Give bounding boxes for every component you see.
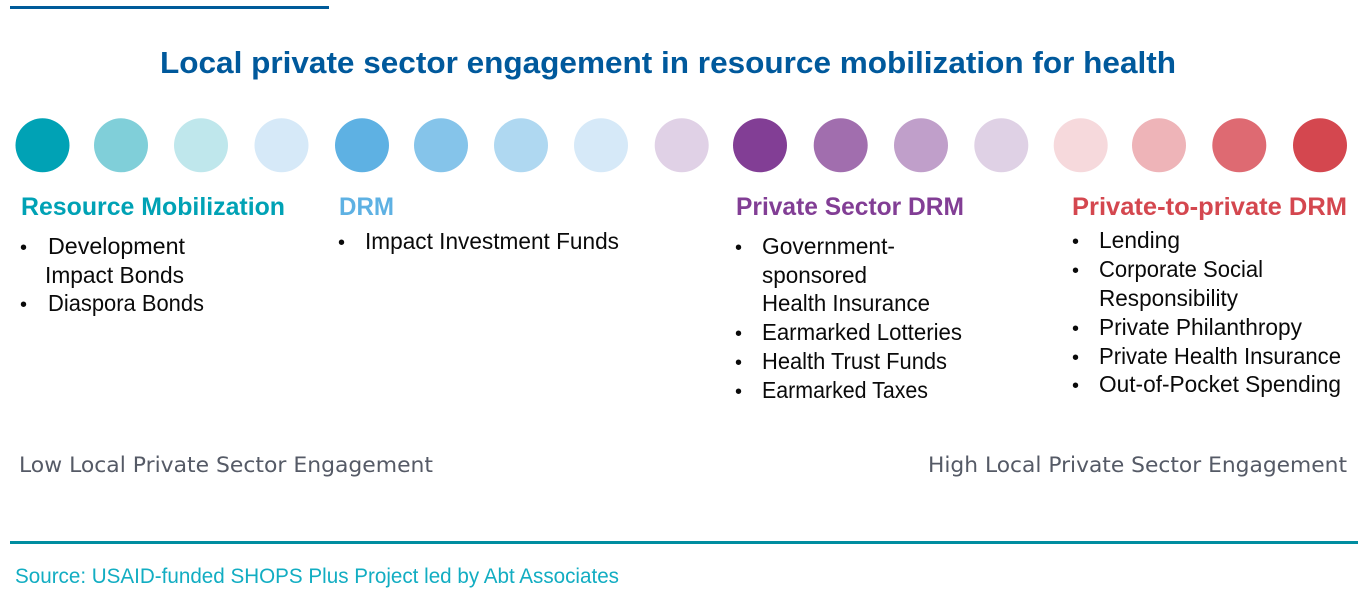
list: resource mobilization items: • — [20, 294, 27, 316]
heading: Private Sector DRM: Private Sector DRM — [736, 193, 964, 221]
list: private sector DRM items: Earmarked Lotteries — [762, 319, 962, 345]
label: high engagement: High Local Private Sector Engagement — [928, 453, 1347, 477]
list: private sector DRM items: • — [735, 352, 742, 374]
list: private-to-private DRM items — [1072, 227, 1341, 397]
panel: Private Sector DRM — [735, 193, 964, 403]
list: resource mobilization items: Diaspora Bonds — [48, 290, 204, 316]
list: DRM items: • — [338, 232, 345, 254]
list: resource mobilization items: Impact Bonds — [45, 262, 184, 288]
list: private sector DRM items — [735, 233, 962, 403]
engagement scale: row of circles — [16, 118, 1347, 172]
panel: Private-to-private DRM — [1072, 193, 1347, 397]
list: private sector DRM items: Health Insurance — [762, 290, 930, 316]
list: private-to-private DRM items: Out-of-Pocket Spending — [1099, 371, 1341, 397]
list: private-to-private DRM items: Corporate Social — [1099, 256, 1263, 282]
list: private sector DRM items: sponsored — [762, 262, 867, 288]
list: private-to-private DRM items: • — [1072, 318, 1079, 340]
panel: Resource Mobilization — [20, 193, 285, 316]
list: private-to-private DRM items: • — [1072, 231, 1079, 253]
list: resource mobilization items: • — [20, 237, 27, 259]
list: DRM items: Impact Investment Funds — [365, 228, 619, 254]
list: private-to-private DRM items: Private Philanthropy — [1099, 314, 1302, 340]
list: private-to-private DRM items: • — [1072, 260, 1079, 282]
list: private sector DRM items: • — [735, 237, 742, 259]
list: private sector DRM items: Government- — [762, 233, 895, 259]
list: private sector DRM items: • — [735, 323, 742, 345]
title: Local private sector engagement in resource mobilization for health — [160, 45, 1176, 80]
heading: Resource Mobilization: Resource Mobilization — [21, 193, 285, 221]
source note: Source: USAID-funded SHOPS Plus Project led by Abt Associates — [15, 565, 619, 588]
list: private-to-private DRM items: Responsibility — [1099, 285, 1238, 311]
list: private-to-private DRM items: • — [1072, 375, 1079, 397]
list: resource mobilization items: Development — [48, 233, 186, 259]
heading: DRM: DRM — [339, 193, 394, 221]
list: resource mobilization items — [20, 233, 204, 316]
list: private sector DRM items: • — [735, 381, 742, 403]
label: low engagement: Low Local Private Sector Engagement — [19, 453, 433, 477]
list: private-to-private DRM items: • — [1072, 347, 1079, 369]
panel: DRM — [338, 193, 619, 254]
list: private-to-private DRM items: Lending — [1099, 227, 1180, 253]
heading: Private-to-private DRM: Private-to-private DRM — [1072, 193, 1347, 221]
list: private-to-private DRM items: Private Health Insurance — [1099, 343, 1341, 369]
list: private sector DRM items: Health Trust Funds — [762, 348, 947, 374]
list: private sector DRM items: Earmarked Taxes — [762, 377, 928, 403]
